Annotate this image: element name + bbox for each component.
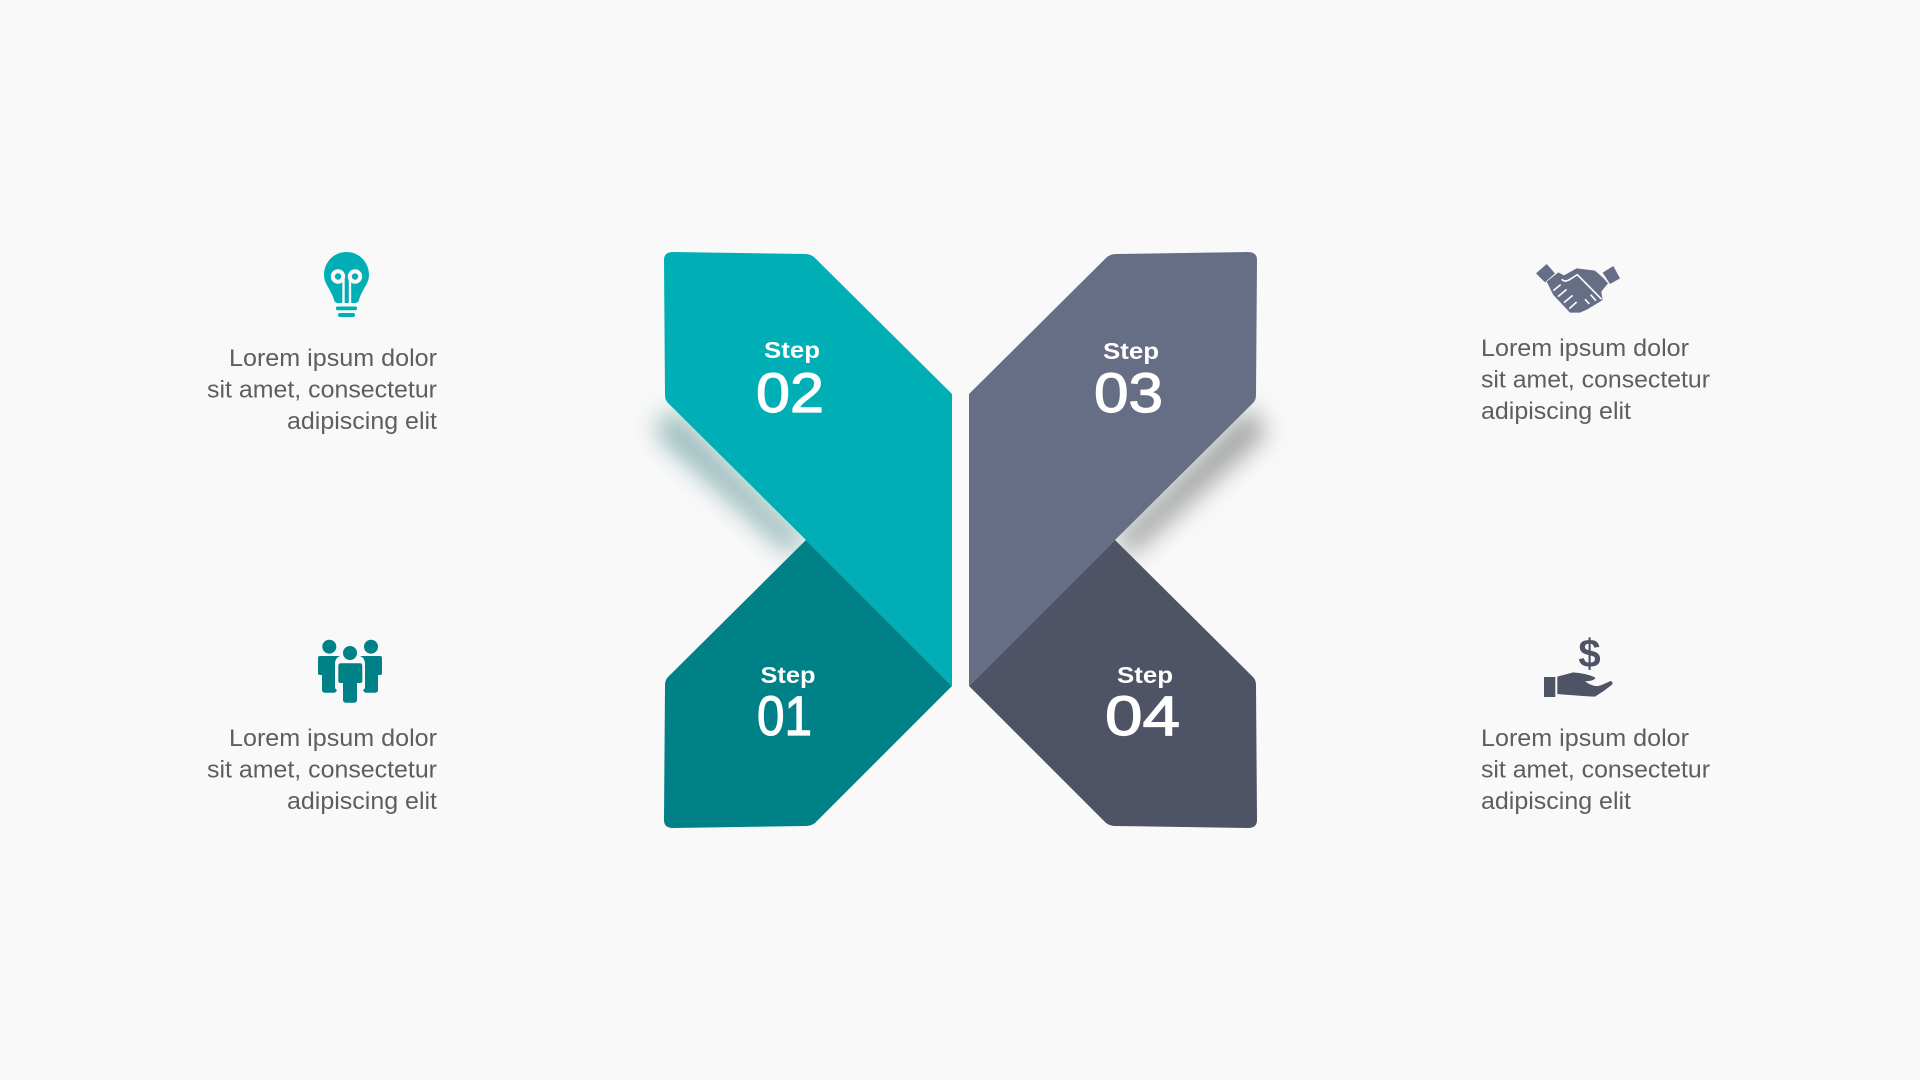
step 01 label: Step (760, 662, 816, 688)
text: step 04 description: sit amet, consectetur (1481, 756, 1710, 784)
step 03 number: 03 (1094, 361, 1163, 424)
text: step 03 description: adipiscing elit (1481, 398, 1631, 425)
text: step 01 description: adipiscing elit (287, 788, 437, 815)
shadow: step 02 (654, 408, 806, 556)
step 03 label: Step (1103, 338, 1159, 364)
panel: step 04 (969, 540, 1257, 828)
icon: handshake (1536, 264, 1620, 313)
text: step 01 description: Lorem ipsum dolor (229, 725, 437, 752)
icon: hand holding dollar (1544, 632, 1613, 697)
panel: step 01 (664, 540, 952, 828)
icon: light bulb (324, 252, 369, 317)
text: step 02 description: Lorem ipsum dolor (229, 345, 437, 372)
step 01 number: 01 (757, 684, 812, 747)
text: step 01 description (207, 725, 437, 815)
icon: hand holding dollar: $ (1578, 632, 1601, 676)
text: step 04 description: Lorem ipsum dolor (1481, 725, 1689, 752)
text: step 02 description: adipiscing elit (287, 408, 437, 435)
step 04 number: 04 (1105, 684, 1180, 747)
shadow: step 03 (1115, 408, 1267, 556)
step 02 label: Step (764, 337, 820, 363)
text: step 01 description: sit amet, consectetur (207, 756, 437, 784)
text: step 03 description: Lorem ipsum dolor (1481, 335, 1689, 362)
text: step 03 description: sit amet, consectetur (1481, 366, 1710, 394)
step 04 label: Step (1117, 662, 1173, 688)
text: step 04 description (1481, 725, 1710, 815)
icon: team of people (318, 640, 382, 703)
step 02 number: 02 (756, 361, 824, 424)
panel: step 02 (664, 252, 952, 686)
panel: step 03 (969, 252, 1257, 686)
text: step 03 description (1481, 335, 1710, 425)
text: step 04 description: adipiscing elit (1481, 788, 1631, 815)
text: step 02 description: sit amet, consectetur (207, 376, 437, 404)
text: step 02 description (207, 345, 437, 435)
